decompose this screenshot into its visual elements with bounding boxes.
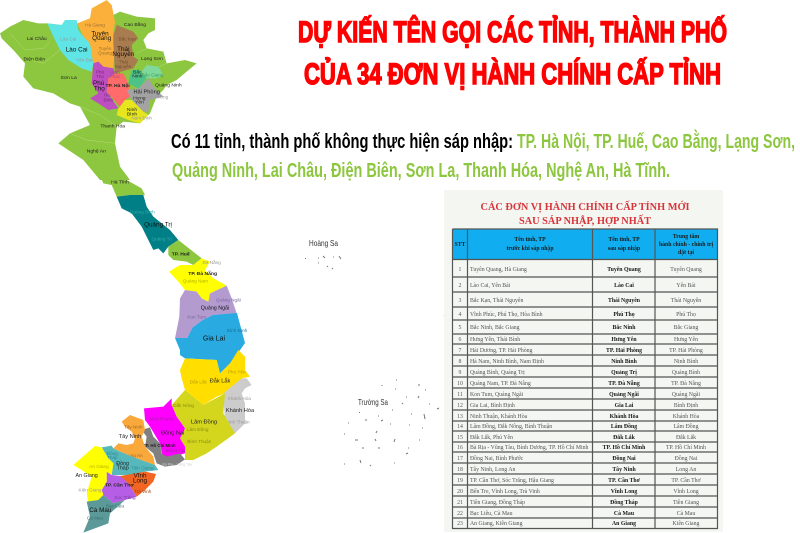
row 17: Đồng Nai: [675, 455, 698, 462]
table header: trước khi sáp nhập: [506, 246, 554, 252]
row 1: Tuyên Quang, Hà Giang: [470, 267, 527, 273]
province: Đồng Tháp: Tháp: [117, 465, 129, 471]
city: Đà Nẵng: Quảng Nam: [183, 279, 208, 284]
row 18: [457, 467, 696, 473]
city: Hà Nội: TP. Hà Nội: [106, 83, 130, 89]
table grid: [452, 229, 718, 528]
province: Tây Ninh: [113, 415, 155, 465]
row 22: Cà Mau: [614, 511, 635, 517]
province: Đồng Tháp: Đồng: [107, 451, 118, 456]
province: Hà Tĩnh: [98, 172, 145, 197]
province: northern green base (Lai Châu, Điện Biên, Sơn La, Cao Bằng, Lạng Sơn, Quảng Ninh, Thanh Hóa, Nghệ An): Cao Bằng: [124, 21, 146, 28]
city: TP. Hồ Chí Minh: Bà Rịa - Vũng Tàu: [162, 463, 192, 467]
row 18: Tây Ninh, Long An: [470, 467, 516, 473]
row 17: Đồng Nai, Bình Phước: [470, 455, 524, 462]
province: Phú Thọ: Thọ: [96, 74, 104, 79]
row 22: 22: [457, 511, 463, 517]
province: An Giang: An Giang: [76, 473, 98, 479]
row 12: 12: [457, 403, 463, 409]
row 3: Thái Nguyên: [608, 298, 641, 304]
row 10: 10: [457, 381, 463, 387]
table title: [480, 200, 690, 227]
row 11: 11: [457, 392, 463, 398]
row 3: Thái Nguyên: [671, 298, 701, 304]
row 4: Phú Thọ: [676, 312, 696, 318]
province: Vĩnh Long: Vĩnh: [133, 472, 147, 479]
province: Ninh Bình: Nam Định: [131, 116, 152, 121]
row 1: Tuyên Quang: [607, 267, 641, 273]
row 12: [457, 403, 698, 409]
subheading: provinces not merged: [171, 129, 795, 182]
row 9: Quảng Trị: [611, 370, 637, 376]
city: Hà Nội: Vĩnh: [110, 70, 120, 75]
row 13: 13: [457, 414, 463, 420]
row 13: Khánh Hòa: [610, 414, 639, 420]
row 7: 7: [459, 348, 462, 354]
row 2: 2: [459, 283, 462, 289]
province: An Giang: An Giang: [89, 464, 109, 469]
row 20: [457, 488, 699, 495]
row 12: Gia Lai: [615, 403, 634, 409]
row 8: Ninh Bình: [611, 359, 638, 365]
row 11: Kon Tum, Quảng Ngãi: [470, 392, 524, 398]
row 8: [459, 359, 698, 365]
row 19: 19: [457, 478, 463, 484]
row 17: Đồng Nai: [612, 455, 636, 462]
province: Tuyên Quang: Quang: [98, 51, 112, 56]
province: Lào Cai: Lào Cai: [60, 37, 76, 42]
province: Quảng Ngãi: Quảng Ngãi: [216, 297, 241, 302]
province: Thái Nguyên: Nguyên: [112, 51, 135, 58]
province: Phú Thọ: Thọ: [94, 86, 105, 93]
row 15: Đắk Lắk, Phú Yên: [470, 434, 513, 441]
row 21: Đồng Tháp: [610, 499, 638, 506]
province: Đắk Lắk: Đắk Lắk: [190, 379, 208, 385]
islands: Trường Sa: Trường Sa: [358, 398, 388, 407]
row 20: 20: [457, 489, 463, 495]
table rows: [457, 267, 706, 527]
row 23: An Giang, Kiên Giang: [470, 521, 523, 527]
city: Huế: TP. Huế: [172, 250, 190, 257]
row 7: TP. Hải Phòng: [669, 348, 703, 354]
row 19: [457, 477, 702, 484]
province: Ninh Bình: Bình: [127, 112, 137, 118]
row 23: [457, 521, 700, 527]
row 18: Long An: [676, 467, 696, 473]
province: Tuyên Quang: Hà Giang: [85, 23, 105, 28]
province: northern green base (Lai Châu, Điện Biên, Sơn La, Cao Bằng, Lạng Sơn, Quảng Ninh, Thanh Hóa, Nghệ An): [0, 12, 197, 180]
row 1: Tuyên Quang: [670, 267, 702, 273]
city: Hải Phòng: [127, 78, 169, 112]
province: Đồng Nai: Đồng Nai: [166, 448, 185, 453]
province: Phú Thọ: [90, 62, 118, 110]
city: Hà Nội: Phúc: [110, 74, 121, 79]
province: northern green base (Lai Châu, Điện Biên, Sơn La, Cao Bằng, Lạng Sơn, Quảng Ninh, Thanh Hóa, Nghệ An): Lai Châu: [27, 36, 47, 42]
province: Lâm Đồng: Lâm Đồng: [187, 427, 209, 432]
row 9: 9: [459, 370, 462, 376]
row 16: Bà Rịa - Vũng Tàu, Bình Dương, TP. Hồ Chí Minh: [470, 444, 589, 451]
province: Ninh Bình: Ninh: [127, 107, 137, 113]
row 19: TP. Cần Thơ: [608, 477, 641, 484]
row 7: TP. Hải Phòng: [606, 348, 642, 354]
province: Đắk Lắk: [180, 350, 250, 405]
province: Đồng Tháp: Tiền Giang: [131, 465, 154, 470]
row 21: [457, 499, 699, 506]
row 19: TP. Cần Thơ: [671, 477, 702, 484]
islands: Hoàng Sa: [305, 239, 341, 269]
row 10: [457, 380, 701, 387]
province: Lâm Đồng: Bình Thuận: [187, 439, 212, 444]
map region: central: [98, 172, 241, 338]
row 15: Đắk Lắk: [613, 434, 636, 441]
province: Cà Mau: Cà Mau: [89, 507, 112, 514]
province: An Giang: Kiên Giang: [78, 487, 102, 492]
province: northern green base (Lai Châu, Điện Biên, Sơn La, Cao Bằng, Lạng Sơn, Quảng Ninh, Thanh Hóa, Nghệ An): Điện Biên: [24, 57, 45, 63]
table header: hành chính - chính trị: [659, 242, 713, 248]
province: Lào Cai: Lào Cai: [66, 47, 88, 54]
province: Vĩnh Long: [120, 472, 156, 497]
province: Quảng Trị: Quảng Bình: [130, 210, 155, 215]
province: Tây Ninh: Tây Ninh: [124, 424, 143, 429]
table title: CÁC ĐƠN VỊ HÀNH CHÍNH CẤP TỈNH MỚI: [480, 200, 690, 213]
city: Hải Phòng: Yên: [135, 100, 144, 106]
province: northern green base (Lai Châu, Điện Biên, Sơn La, Cao Bằng, Lạng Sơn, Quảng Ninh, Thanh Hóa, Nghệ An): Lạng Sơn: [141, 56, 163, 62]
province: Đồng Tháp: Đồng: [116, 461, 129, 467]
province: Tây Ninh: Long An: [125, 453, 143, 458]
row 7: [459, 348, 703, 354]
province: Lào Cai: [47, 20, 93, 72]
table title: SAU SÁP NHẬP, HỢP NHẤT: [519, 214, 651, 227]
row 19: TP. Cần Thơ, Sóc Trăng, Hậu Giang: [470, 477, 554, 484]
row 13: [457, 414, 700, 420]
row 11: Quảng Ngãi: [672, 392, 700, 398]
province: Quảng Ngãi: Kon Tum: [187, 314, 206, 319]
row 12: Bình Định: [674, 403, 698, 409]
row 3: 3: [459, 298, 462, 304]
row 21: 21: [457, 500, 463, 506]
province: Phú Thọ: Bình: [104, 97, 114, 102]
row 22: Bạc Liêu, Cà Mau: [470, 511, 513, 517]
province: northern green base (Lai Châu, Điện Biên, Sơn La, Cao Bằng, Lạng Sơn, Quảng Ninh, Thanh Hóa, Nghệ An): Sơn La: [61, 75, 77, 81]
row 5: [459, 324, 698, 331]
title: [298, 15, 727, 91]
row 15: 15: [457, 435, 463, 441]
row 13: Khánh Hòa: [673, 414, 700, 420]
row 5: Bắc Giang: [674, 324, 698, 331]
province: Tuyên Quang: [77, 0, 115, 68]
city: Hải Phòng: Hải Phòng: [133, 89, 160, 95]
row 22: Cà Mau: [677, 511, 695, 517]
row 16: [457, 444, 706, 451]
row 10: TP. Đà Nẵng: [608, 380, 640, 387]
row 9: [459, 370, 700, 376]
province: Thái Nguyên: Thái: [119, 59, 128, 64]
row 22: [457, 511, 695, 517]
small green arrow: [444, 315, 446, 322]
row 20: Bến Tre, Vĩnh Long, Trà Vinh: [470, 488, 540, 495]
row 3: Bắc Kạn, Thái Nguyên: [470, 297, 523, 304]
province: Khánh Hòa: Khánh Hòa: [226, 408, 255, 414]
province: Hà Tĩnh: Hà Tĩnh: [111, 180, 129, 186]
row 2: Lào Cai: [614, 283, 634, 289]
row 20: Vĩnh Long: [673, 489, 699, 495]
row 14: Lâm Đồng: [611, 423, 637, 430]
province: Quảng Trị: [117, 195, 178, 253]
row 2: Lào Cai, Yên Bái: [470, 283, 511, 289]
province: Quảng Ngãi: Quảng Ngãi: [201, 305, 229, 311]
province: Đồng Tháp: [102, 446, 158, 475]
row 2: [459, 283, 696, 289]
islands: Trường Sa: [344, 380, 439, 466]
province: northern green base (Lai Châu, Điện Biên, Sơn La, Cao Bằng, Lạng Sơn, Quảng Ninh, Thanh Hóa, Nghệ An): Quảng Ninh: [155, 83, 182, 89]
table header: Tên tỉnh, TP: [514, 237, 546, 243]
row 11: Quảng Ngãi: [609, 392, 639, 398]
province: Đồng Tháp: Tháp: [107, 455, 118, 460]
row 11: [457, 392, 700, 398]
row 6: Hưng Yên: [674, 337, 698, 343]
province: Cần Thơ: Sóc Trăng: [114, 495, 136, 500]
city: Đà Nẵng: TP. Đà Nẵng: [188, 270, 217, 277]
province: Thái Nguyên: Bắc Kạn: [119, 36, 137, 42]
city: TP. Hồ Chí Minh: [142, 427, 192, 467]
row 6: Hưng Yên, Thái Bình: [470, 337, 520, 343]
table header: STT: [455, 242, 466, 248]
row 5: Bắc Ninh: [612, 324, 636, 331]
row 21: Tiền Giang: [673, 499, 699, 506]
row 14: [457, 423, 699, 430]
map of Vietnam: [0, 0, 255, 533]
table header: Tên tỉnh, TP: [608, 237, 640, 243]
province: Vĩnh Long: Long: [133, 478, 148, 485]
row 1: 1: [459, 267, 462, 273]
row 15: [457, 434, 696, 441]
row 4: 4: [459, 312, 462, 318]
province: Khánh Hòa: Khánh Hòa: [228, 396, 251, 401]
row 9: Quảng Bình: [672, 370, 700, 376]
row 5: Bắc Ninh, Bắc Giang: [470, 324, 520, 331]
province: Thái Nguyên: Thái: [117, 46, 129, 53]
province: Thái Nguyên: Nguyên: [115, 64, 132, 69]
row 5: 5: [459, 325, 462, 331]
province: Quảng Ngãi: [175, 286, 241, 338]
province: northern green base (Lai Châu, Điện Biên, Sơn La, Cao Bằng, Lạng Sơn, Quảng Ninh, Thanh Hóa, Nghệ An): Nghệ An: [87, 149, 106, 155]
province: Cà Mau: Bạc Liêu: [106, 503, 124, 508]
province: Khánh Hòa: Ninh Thuận: [226, 420, 250, 425]
row 17: 17: [457, 456, 463, 462]
row 8: Hà Nam, Ninh Bình, Nam Định: [470, 359, 544, 365]
province: Quảng Trị: Quảng Trị: [144, 222, 172, 229]
row 21: Tiền Giang, Đồng Tháp: [470, 499, 525, 506]
row 14: Lâm Đồng: [674, 423, 699, 430]
province: Tuyên Quang: Quang: [92, 35, 112, 42]
city: Hải Phòng: Hải Phòng: [146, 94, 169, 99]
row 4: Phú Thọ: [613, 312, 635, 318]
province: Lâm Đồng: Lâm Đồng: [191, 419, 217, 425]
city: Hà Nội: [106, 70, 130, 107]
row 6: Hưng Yên: [611, 337, 637, 343]
province: Tuyên Quang: Tuyên: [91, 31, 109, 38]
province: Bắc Ninh: Bắc: [133, 68, 142, 75]
province: Cà Mau: Cà Mau: [87, 516, 104, 521]
row 6: [459, 337, 698, 343]
province: Bắc Ninh: Bắc Giang: [142, 72, 164, 78]
province: Tây Ninh: Tây Ninh: [119, 434, 141, 440]
row 10: TP. Đà Nẵng: [671, 380, 701, 387]
city: Huế: [168, 240, 202, 265]
province: Cần Thơ: TP. Cần Thơ: [105, 483, 134, 489]
city: Hải Phòng: Hưng: [133, 95, 146, 101]
row 23: An Giang: [612, 521, 636, 527]
row 10: Quảng Nam, TP. Đà Nẵng: [470, 380, 531, 387]
province: Cần Thơ: [102, 472, 137, 503]
province: Bắc Ninh: Ninh: [132, 74, 143, 80]
row 18: Tây Ninh: [612, 467, 636, 473]
map region: south: [73, 313, 255, 533]
province: Quảng Trị: Quảng Trị: [151, 237, 172, 242]
row 23: Kiên Giang: [673, 521, 700, 527]
row 12: Gia Lai, Bình Định: [470, 403, 515, 409]
row 2: Yên Bái: [676, 283, 696, 289]
row 9: Quảng Bình, Quảng Trị: [470, 370, 525, 376]
province: Gia Lai: Gia Lai: [203, 336, 226, 343]
province: Cà Mau: [83, 495, 125, 533]
row 3: [459, 297, 701, 304]
row 7: Hải Dương, TP. Hải Phòng: [470, 348, 533, 354]
row 4: Vĩnh Phúc, Phú Thọ, Hòa Bình: [470, 312, 543, 318]
row 8: 8: [459, 359, 462, 365]
province: Đồng Nai: [144, 398, 185, 460]
row 14: Lâm Đồng, Đắk Nông, Bình Thuận: [470, 423, 552, 430]
province: Gia Lai: Bình Định: [227, 328, 248, 333]
province: Tuyên Quang: Tuyên: [99, 46, 112, 51]
panel: table of new provincial units: [444, 190, 723, 532]
province: Thái Nguyên: [112, 25, 138, 73]
row 1: [459, 267, 702, 273]
province: Ninh Bình: [117, 100, 152, 123]
table header: Trung tâm: [673, 234, 699, 240]
province: Gia Lai: [175, 313, 248, 373]
row 8: Ninh Bình: [674, 359, 698, 365]
city: Đà Nẵng: Đà Nẵng: [202, 259, 221, 265]
row 4: [459, 312, 696, 318]
row 15: Đắk Lắk: [676, 434, 696, 441]
province: Lâm Đồng: Đắk Nông: [173, 402, 194, 408]
province: Bắc Ninh: [128, 65, 164, 88]
province: Khánh Hòa: [223, 378, 255, 433]
province: Đồng Nai: Bình Phước: [149, 417, 175, 422]
row 14: 14: [457, 424, 463, 430]
row 17: [457, 455, 698, 462]
row 16: TP. Hồ Chí Minh: [666, 444, 706, 451]
islands: Hoàng Sa: Hoàng Sa: [309, 239, 338, 248]
city: TP. Hồ Chí Minh: TP. Hồ Chí Minh: [143, 443, 176, 448]
row 23: 23: [457, 521, 463, 527]
province: Vĩnh Long: Trà Vinh: [134, 489, 152, 494]
province: Lào Cai: Yên Bái: [76, 58, 92, 63]
province: Phú Thọ: Phú: [96, 69, 105, 74]
row 20: Vĩnh Long: [611, 489, 637, 495]
province: Lâm Đồng: [172, 390, 235, 460]
table header: sau sáp nhập: [608, 246, 640, 252]
province: northern green base (Lai Châu, Điện Biên, Sơn La, Cao Bằng, Lạng Sơn, Quảng Ninh, Thanh Hóa, Nghệ An): Thanh Hóa: [100, 124, 125, 130]
row 6: 6: [459, 337, 462, 343]
subheading line 1: black lead-in: Có 11 tỉnh, thành phố không thực hiện sáp nhập:: [171, 131, 513, 153]
table header: đặt tại: [678, 249, 694, 256]
province: Đắk Lắk: Phú Yên: [228, 369, 246, 374]
province: Phú Thọ: Hòa: [104, 93, 113, 98]
row 16: TP. Hồ Chí Minh: [603, 444, 646, 451]
table header: [452, 229, 718, 259]
province: Đồng Nai: Đồng Nai: [161, 431, 184, 437]
province: Phú Thọ: Phú: [93, 80, 105, 87]
province: An Giang: [73, 446, 113, 503]
city: Đà Nẵng: [169, 258, 227, 302]
province: Đắk Lắk: Đắk Lắk: [210, 377, 231, 384]
row 16: 16: [457, 445, 463, 451]
row 13: Ninh Thuận, Khánh Hòa: [470, 414, 528, 420]
map region: north: [0, 0, 197, 180]
row 18: 18: [457, 467, 463, 473]
